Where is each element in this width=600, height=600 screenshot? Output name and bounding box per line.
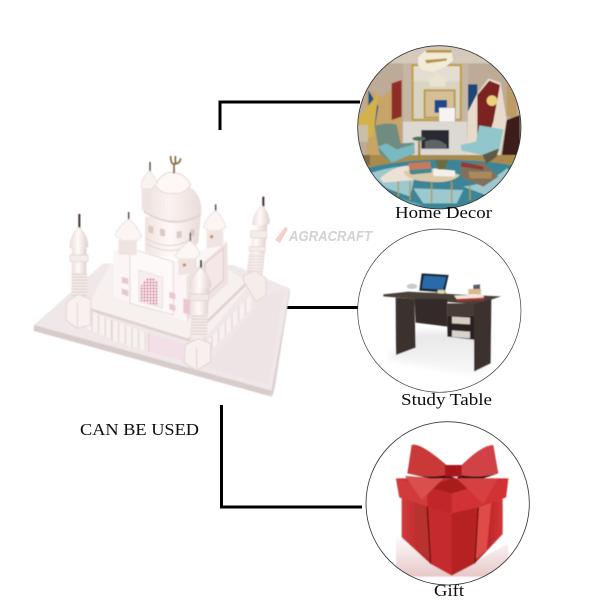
main hall bbox=[113, 240, 228, 322]
connector: study table bbox=[275, 306, 358, 309]
connector: gift bbox=[222, 405, 362, 507]
bow bbox=[407, 445, 448, 476]
base slab bbox=[33, 263, 290, 397]
label: Gift: Gift bbox=[434, 581, 464, 600]
connector: home decor bbox=[220, 102, 360, 130]
watermark text: AGRACRAFT bbox=[288, 228, 374, 245]
chandeliers bbox=[418, 50, 453, 72]
label: Study Table: Study Table bbox=[401, 390, 492, 409]
watermark: AGRACRAFT logo bbox=[275, 227, 374, 245]
front right chhatri bbox=[175, 233, 200, 275]
right panels bbox=[468, 84, 477, 111]
front left chhatri bbox=[115, 212, 142, 255]
minaret: front bbox=[184, 260, 211, 371]
circle: gift photo bbox=[363, 420, 533, 587]
side table bbox=[418, 139, 420, 161]
left chair bbox=[375, 123, 415, 163]
circle: home decor photo bbox=[357, 45, 523, 213]
fireplace bbox=[403, 122, 467, 157]
lid bbox=[396, 478, 508, 513]
floor bbox=[357, 155, 523, 168]
rear right chhatri bbox=[203, 204, 226, 248]
circle: study table photo bbox=[357, 228, 523, 395]
minaret: left bbox=[66, 214, 91, 328]
marble Taj Mahal model bbox=[33, 156, 290, 397]
coffee tables bbox=[380, 166, 415, 183]
plinth bbox=[87, 263, 252, 360]
right chair bbox=[461, 125, 503, 163]
main dome bbox=[143, 156, 201, 257]
rear chhatri left bbox=[141, 162, 157, 210]
rug bbox=[368, 158, 512, 209]
box bbox=[402, 497, 431, 564]
mirror bbox=[411, 64, 462, 121]
label: Home Decor: Home Decor bbox=[395, 203, 492, 222]
caption: CAN BE USED: CAN BE USED bbox=[80, 420, 199, 439]
left panels bbox=[366, 89, 402, 156]
minaret: right bbox=[243, 197, 269, 302]
icon: brush mark bbox=[275, 227, 288, 243]
